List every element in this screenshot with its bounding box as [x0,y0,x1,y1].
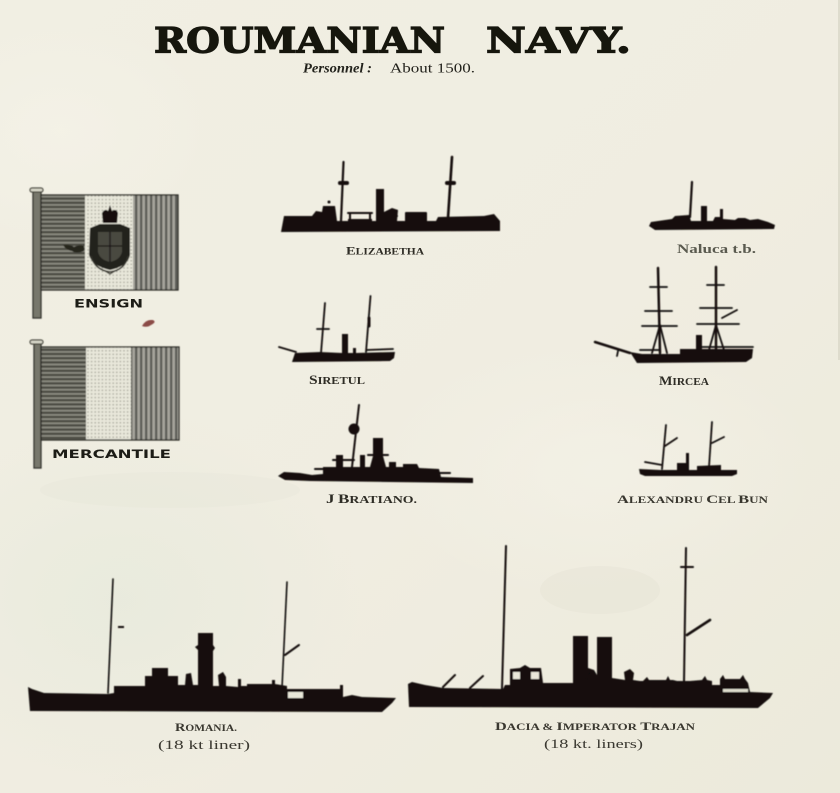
subtitle: personnel: About 1500. [390,60,475,76]
label: Elizabetha: ELIZABETHA [346,244,424,258]
label: Romania: ROMANIA. [175,720,237,734]
ship: Siretul [279,296,395,362]
ship: Naluca t.b. [649,182,775,230]
stain [142,320,155,327]
label: J Bratiano: J B RATIANO. [326,491,417,506]
ship: J Bratiano [278,405,473,483]
label: Dacia and Imperator Trajan [495,719,695,751]
label: Siretul: SIRETUL [309,373,365,387]
label: Mircea: MIRCEA [659,374,710,388]
title: NAVY. [486,20,631,62]
label: Alexandru Cel Bun: A LEXANDRU C EL B UN [617,492,768,506]
subtitle: personnel [303,60,475,76]
ship: Romania [28,579,396,712]
label: Romania [158,720,250,752]
ship: Mircea [595,267,753,363]
icon: coat of arms [89,205,130,274]
ship: Dacia and Imperator Trajan [408,546,773,708]
ship: Alexandru Cel Bun [639,422,737,476]
label: Dacia and Imperator Trajan: (18 kt. liners) [544,736,643,751]
title [154,20,631,62]
label: Dacia and Imperator Trajan: D ACIA & IMPERATOR T RAJAN [495,719,695,733]
title: ROUMANIAN [154,20,445,62]
label: mercantile: MERCANTILE [52,447,171,461]
subtitle: personnel: Personnel : [303,60,372,76]
label: ensign: ENSIGN [74,296,143,310]
flag: ensign [30,188,178,318]
label: Romania: (18 kt liner) [158,737,250,752]
flag: mercantile [30,340,179,468]
label: Naluca t.b.: Naluca t.b. [677,241,756,256]
ship: Elizabetha [281,157,500,232]
